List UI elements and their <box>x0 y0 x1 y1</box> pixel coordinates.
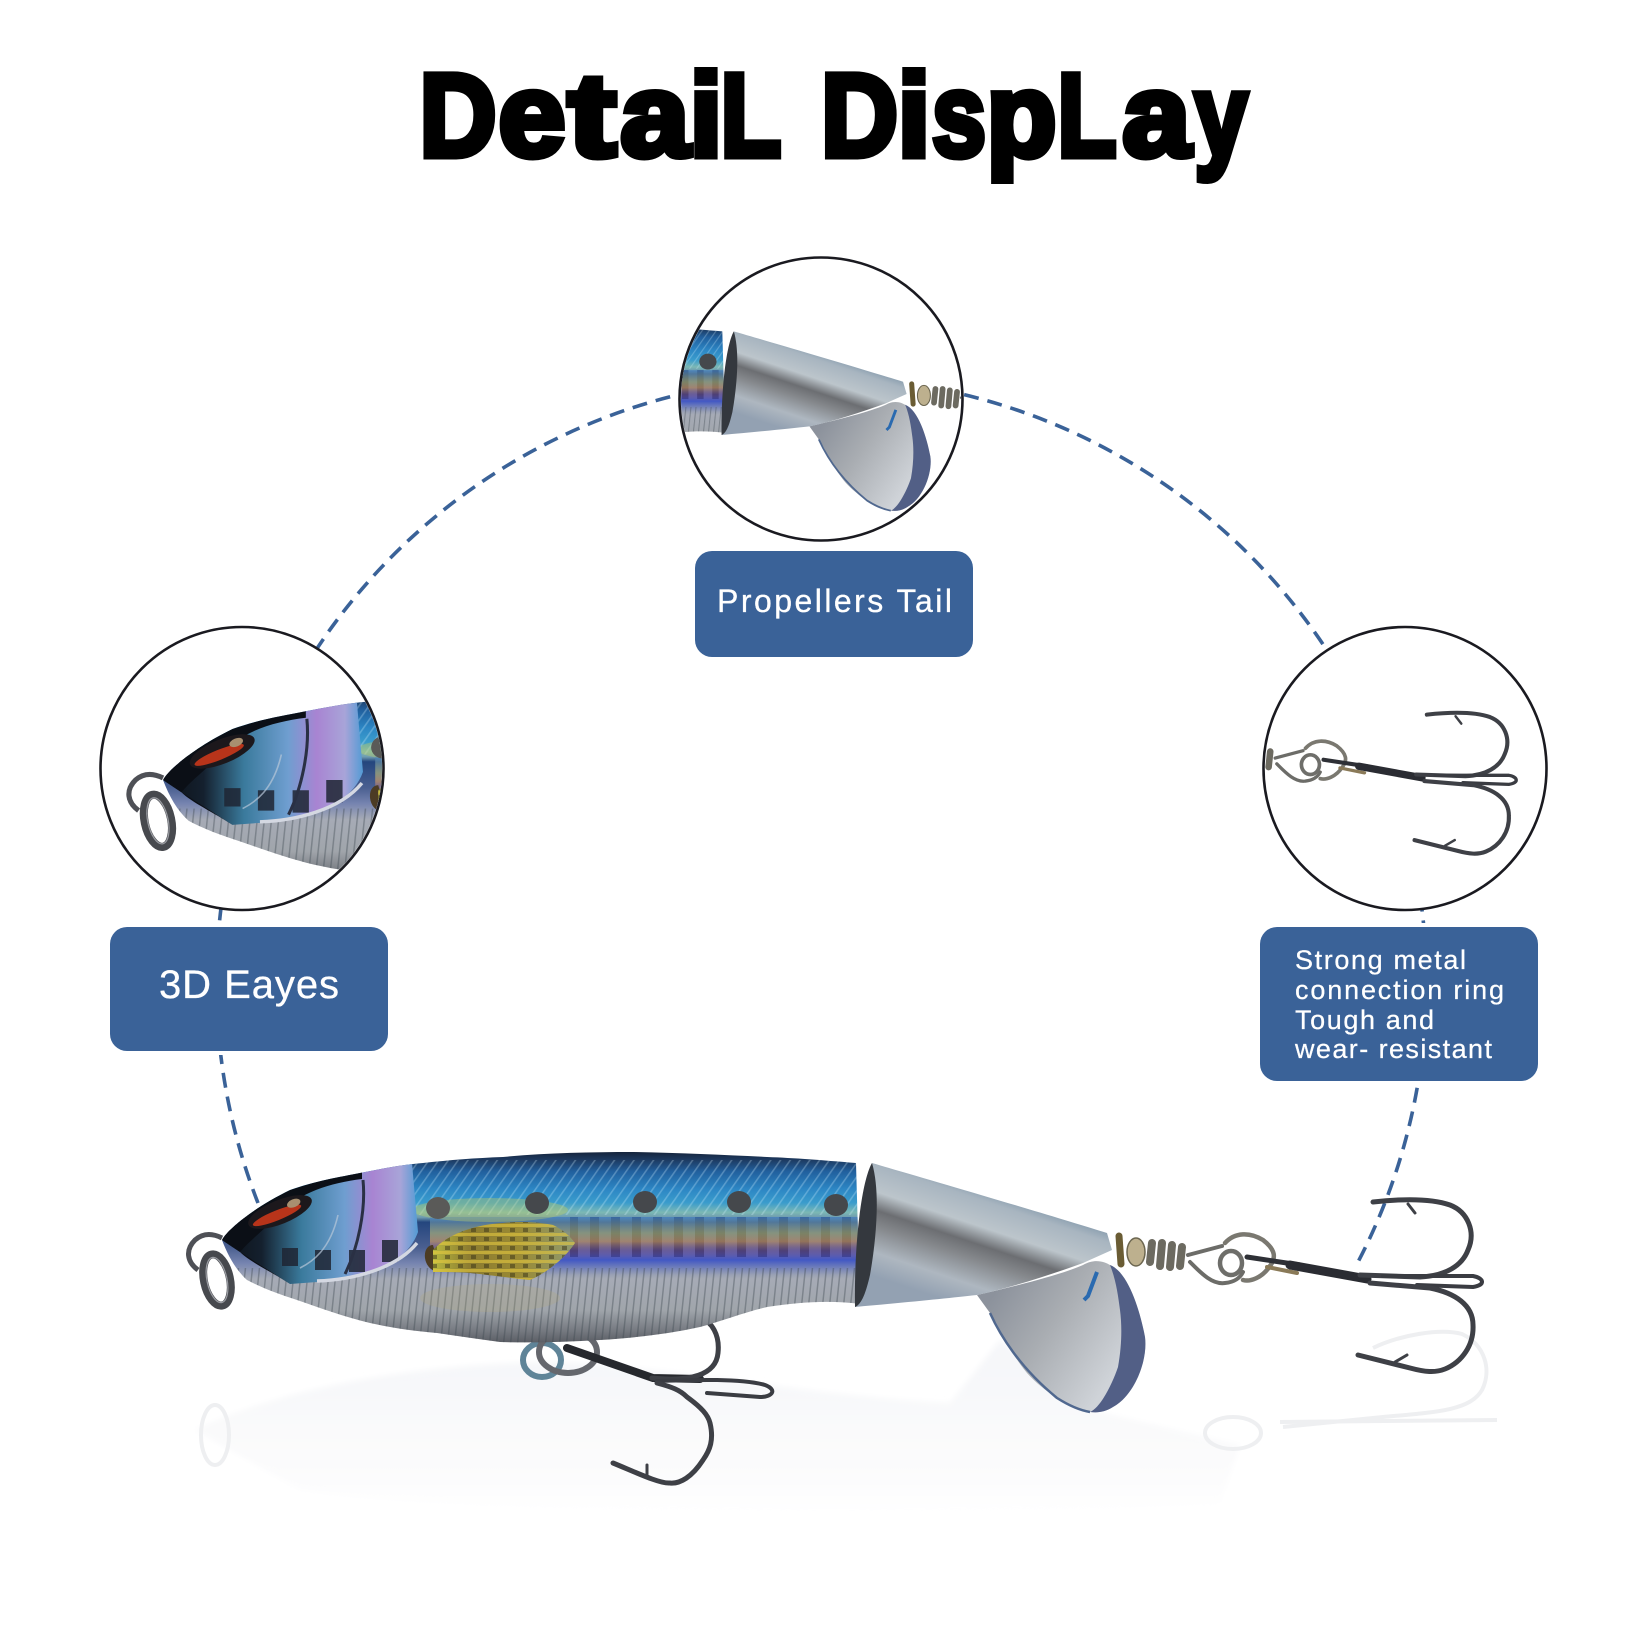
lure body <box>215 1145 865 1352</box>
title: e <box>498 50 566 182</box>
head colour patch <box>222 1163 418 1284</box>
title: D <box>420 50 496 182</box>
front split ring <box>189 1234 235 1308</box>
title: i <box>690 50 722 182</box>
title: y <box>1194 50 1248 182</box>
label: 3D eyes: 3D Eayes <box>159 963 339 1007</box>
propeller tail blade <box>977 1261 1145 1412</box>
belly treble hook <box>523 1302 772 1483</box>
panel: propellers tail <box>678 256 973 657</box>
tail treble hook <box>1247 1200 1482 1372</box>
title: i <box>898 50 930 182</box>
label: strong metal connection ring: connection ring <box>1295 975 1504 1005</box>
panel: connection ring and hook <box>1260 626 1548 1081</box>
detail circle: lure head <box>99 626 385 912</box>
detail circle: propeller tail <box>678 256 964 542</box>
dark nose cap <box>222 1172 362 1252</box>
label: propellers tail: Propellers Tail <box>717 583 952 619</box>
label: 3D eyes <box>106 923 392 1055</box>
title: s <box>932 50 986 182</box>
swivel and ring <box>1119 1234 1274 1283</box>
label: strong metal connection ring: Strong metal <box>1295 945 1466 975</box>
eye <box>244 1188 316 1236</box>
title: L <box>720 50 780 182</box>
title: t <box>568 50 616 182</box>
joint disk <box>855 1163 877 1307</box>
label: strong metal connection ring: Tough and <box>1295 1005 1434 1035</box>
dashed connector arc <box>216 378 1426 1262</box>
green sheen <box>412 1198 568 1222</box>
detail circle: treble hook <box>1262 626 1548 912</box>
body spots <box>426 1191 848 1219</box>
label: strong metal connection ring: wear- resistant <box>1294 1034 1492 1064</box>
title: a <box>1122 50 1192 182</box>
title: D <box>821 50 898 182</box>
label: propellers tail <box>695 551 973 657</box>
panel: 3D eyes <box>99 626 388 1055</box>
lure reflection <box>195 1332 1497 1515</box>
gold fin <box>425 1222 575 1280</box>
title <box>420 50 1248 182</box>
title: p <box>986 50 1056 182</box>
gill lines <box>317 1243 417 1281</box>
label: strong metal connection ring <box>1256 923 1542 1085</box>
tail cone <box>855 1163 1112 1307</box>
title: a <box>620 50 691 182</box>
title: L <box>1058 50 1116 182</box>
main fishing lure <box>189 1145 1482 1483</box>
